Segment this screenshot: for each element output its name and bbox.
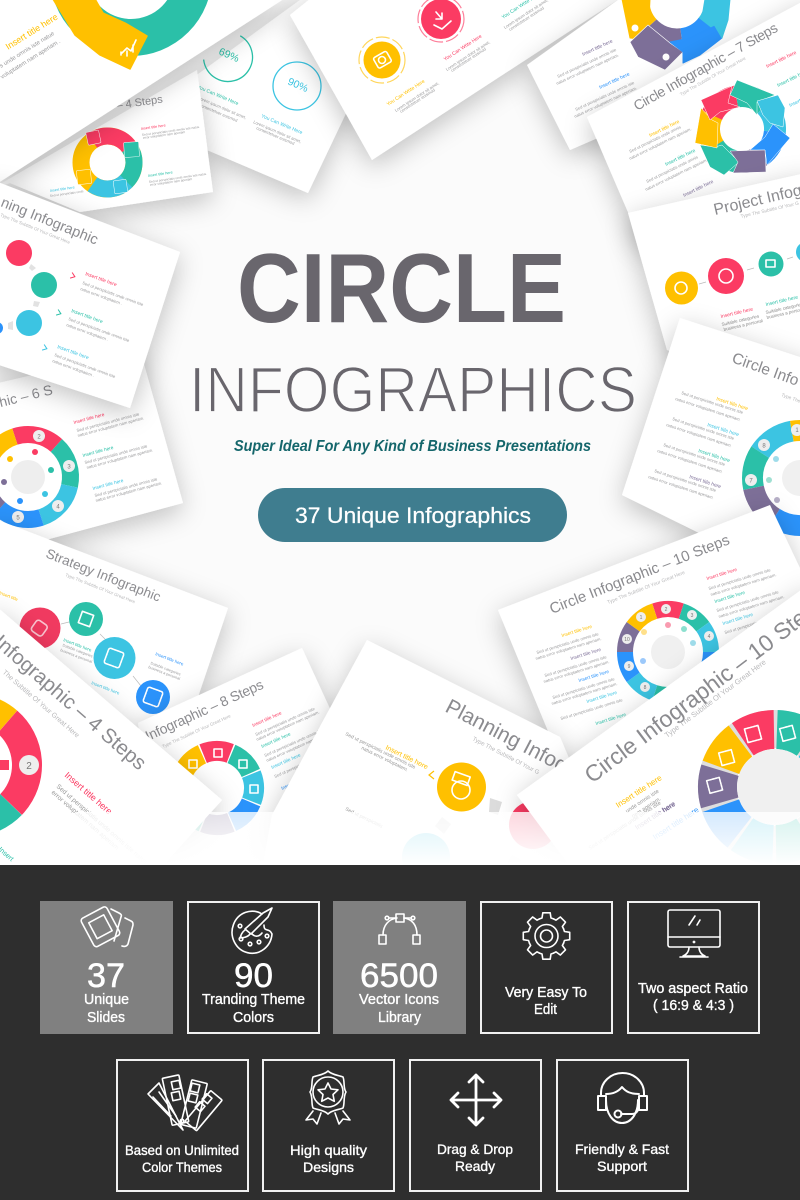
large ten step ring <box>694 706 800 868</box>
slide: circle infographic 10 steps <box>498 505 800 800</box>
slide: circle infographic 6 steps <box>0 350 183 555</box>
ten step captions left: Insert title here <box>570 647 602 662</box>
slide title: Strategy Infographic <box>44 546 163 605</box>
step captions <box>42 271 145 379</box>
captions: natus error voluptatem nam aperiam. <box>555 52 620 86</box>
ten step captions left: Insert title here <box>595 712 627 727</box>
strategy captions: Insert title here <box>91 680 121 696</box>
ten step captions left: Sed ut perspiciatis unde omnis iste <box>536 631 600 655</box>
feature: 6500 vector icons: Vector Icons <box>359 992 439 1008</box>
ten step captions left: Insert title here <box>578 669 610 684</box>
seven step captions: Insert title here <box>765 50 798 70</box>
ten step captions right <box>706 567 785 635</box>
feature: two aspect ratio: Two aspect Ratio <box>638 981 748 997</box>
slide subtitle: Type The Subtitle Of Your Great Here <box>65 572 136 604</box>
eight step captions: Sed ut perspiciatis unde omnis iste <box>672 416 735 441</box>
eight step captions: Insert title here <box>715 396 749 412</box>
step circles <box>402 762 557 881</box>
ten step captions right: Sed ut perspiciatis <box>724 620 758 635</box>
ring fragment <box>53 0 194 69</box>
ten step captions left: Insert title here <box>586 690 618 705</box>
step captions: Insert title here <box>56 344 90 361</box>
slide collage background <box>0 0 800 881</box>
tagline: Super Ideal For Any Kind of Business Presentations <box>234 438 591 455</box>
eight step captions: Insert title here <box>260 731 292 750</box>
feature: 90 theme colors: Colors <box>233 1010 274 1026</box>
heading: CIRCLE: CIRCLE <box>237 233 566 343</box>
step captions: Sed ut perspiciatis unde omnis iste <box>68 316 131 343</box>
90% progress ring: You Can Write Here <box>260 113 303 136</box>
slide subtitle: The Subtitle Of Your Great Here <box>1 669 80 740</box>
feature: unlimited color themes: Color Themes <box>142 1160 222 1175</box>
eight step ring <box>168 739 266 837</box>
four step captions: Insert title here <box>148 171 173 178</box>
slide: circle infographic 8 steps right <box>622 318 800 590</box>
feature: 90 theme colors: Tranding Theme <box>202 992 305 1008</box>
six step ring: 3 <box>67 464 71 470</box>
slide: circle infographic 4 steps <box>0 70 213 212</box>
ten step ring: 4 <box>708 634 711 640</box>
slide subtitle: Type The Subtitle Of Your Great Here <box>663 657 768 740</box>
feature: 37 unique slides: 37 <box>87 957 125 995</box>
slide subtitle: Type The Subtitle Of Your Great Here <box>607 570 686 606</box>
icon: color swatch fan <box>148 1075 222 1131</box>
caption: voluptatem nam aperiam . <box>0 39 62 81</box>
caption: Insert title here <box>4 12 60 52</box>
eight step captions <box>648 390 749 500</box>
90% progress ring <box>253 62 321 146</box>
icon: palette <box>232 908 272 953</box>
six step ring: 2 <box>37 434 41 440</box>
percent caption: consectetuer euismod <box>199 102 239 123</box>
90% progress ring: 90% <box>286 76 310 95</box>
strategy captions: business a personal <box>148 665 181 681</box>
eight step captions: Insert title here <box>697 448 731 464</box>
feature: very easy to edit <box>481 902 612 1033</box>
slide: circle infographic 10 steps large <box>517 580 800 880</box>
captions: Insert title here <box>581 38 614 58</box>
slide: circle infographic 7 steps <box>587 0 800 300</box>
90% progress ring: consectetuer euismod <box>256 125 296 146</box>
feature: high quality designs: High quality <box>290 1142 367 1158</box>
slide title: Planning Infog <box>442 695 571 777</box>
ten step ring: 2 <box>665 607 668 613</box>
six step ring: 5 <box>16 516 20 522</box>
ten step captions left: natus error voluptatem nam aperiam. <box>535 636 602 661</box>
large ten step captions: Insert title here <box>634 801 677 832</box>
large ten step captions: nem aperiam. <box>631 796 663 820</box>
ten step captions right: natus error voluptatem nam aperiam. <box>710 572 777 597</box>
captions: Insert title here <box>598 71 631 91</box>
six step captions: natus error voluptatem nam aperiam. <box>95 480 163 503</box>
step captions: natus error voluptatem . <box>52 358 95 378</box>
caption: error voluptatem nam aperiam <box>50 789 120 852</box>
four step captions: Sed ut perspiciatis unde <box>50 189 84 198</box>
icon: slides <box>80 906 133 948</box>
ten step captions right: Insert title here <box>706 567 738 582</box>
step captions: Insert title here <box>84 271 118 288</box>
ring fragment <box>621 0 733 70</box>
eight step captions: Insert title here <box>706 422 740 438</box>
step captions: Insert title here <box>720 307 754 320</box>
slide title: Circle Infographic – 10 Steps <box>547 532 732 618</box>
ten step captions left <box>535 624 627 727</box>
strategy captions: Suitable categories <box>150 661 181 677</box>
six step captions: Insert title here <box>82 445 114 459</box>
large ten step captions: here <box>661 801 677 815</box>
step captions: natus error voluptatem . <box>80 286 123 306</box>
eight step captions: natus error voluptatem nam aperiam. <box>666 422 733 448</box>
slide subtitle: Type The Subtitle Of Your Great Here <box>161 713 232 749</box>
percent caption: You Can Write Here <box>196 84 239 107</box>
six step captions: Sed ut perspiciatis unde omnis iste <box>84 443 148 465</box>
four step ring <box>0 684 51 846</box>
eight step captions: Sed ut perspiciatis unde omnis iste <box>254 706 316 737</box>
captions: Lorem ipsum dolor sit amet, <box>394 81 440 113</box>
step captions <box>344 731 434 830</box>
feature: 37 unique slides: Slides <box>87 1010 125 1026</box>
strategy captions: Insert title here <box>63 637 93 653</box>
six step ring <box>0 417 88 537</box>
step captions: Sed ut perspiciatis unde omnis iste <box>344 731 416 771</box>
ten step ring: 1 <box>640 615 643 621</box>
ten step captions right: Insert title here <box>722 612 754 627</box>
ten step captions right: natus error voluptatem nam aperiam. <box>718 594 785 619</box>
six step captions: Sed ut perspiciatis unde omnis iste <box>76 411 140 433</box>
large ten step captions <box>588 773 701 852</box>
captions: Sed ut perspiciatis unde omnis iste <box>574 80 636 112</box>
eight step captions: Sed ut perspiciatis unde omnis iste <box>663 442 726 467</box>
slide: circle infographic 8 steps <box>138 648 372 870</box>
feature: friendly support: Friendly & Fast <box>575 1141 669 1157</box>
caption: s unde omnis iste natue <box>0 31 56 70</box>
feature: unlimited color themes: Based on Unlimited <box>125 1143 239 1158</box>
eight step captions: Insert title here <box>280 773 312 792</box>
captions: consectetuer euismod <box>450 46 487 73</box>
eight step captions: Insert title here <box>270 752 302 771</box>
seven step captions: natus error voluptatem nam aperiam. <box>628 126 692 161</box>
features panel <box>0 865 800 1200</box>
captions <box>555 38 638 119</box>
captions: You Can Write Here <box>443 33 483 63</box>
icon: gear <box>523 913 570 959</box>
slide: project infographic <box>628 171 800 400</box>
ten step ring: 3 <box>691 613 694 619</box>
step captions <box>720 295 800 332</box>
ten step ring: 8 <box>644 685 647 691</box>
feature: 6500 vector icons: Library <box>378 1010 422 1026</box>
slide: big yellow and teal ring <box>0 0 290 185</box>
ten step captions left: Sed ut perspiciatis unde omnis iste <box>544 654 608 678</box>
strategy captions: Insert title here <box>155 651 185 667</box>
seven step captions: Sed ut perspiciatis unde omnis <box>645 154 699 184</box>
large ten step captions: Insert title here <box>651 805 701 842</box>
eight step captions: natus error voluptatem nam aperiam. <box>675 396 742 422</box>
four step captions: error voluptatem nam aperiam <box>143 130 186 140</box>
seven step captions: Insert title here <box>648 119 681 139</box>
six step captions: Insert title here <box>92 478 124 492</box>
feature: high quality designs: Designs <box>303 1159 354 1175</box>
feature: friendly support: Support <box>597 1158 647 1174</box>
slide: circle infographic 4 steps large <box>0 601 222 880</box>
captions <box>386 0 549 114</box>
button: 37 unique infographics <box>258 488 567 542</box>
69% progress ring <box>195 24 261 90</box>
percent caption: Lorem ipsum dolor sit amet, <box>198 95 247 120</box>
step circles <box>0 240 57 336</box>
feature: 90 theme colors: 90 <box>234 957 273 995</box>
feature: 6500 vector icons: 6500 <box>360 957 438 995</box>
slide subtitle: Type The Subtitle Of Your Great Here <box>0 212 71 245</box>
slide title: ning Infographic <box>0 195 100 248</box>
captions: natus error voluptatem nam aperiam. <box>573 85 638 119</box>
slide title: Circle Infographic – 7 Steps <box>631 19 780 114</box>
six step captions: natus error voluptatem nam aperiam. <box>86 447 154 470</box>
feature: 6500 vector icons <box>333 901 466 1034</box>
icon: bezier curve <box>379 914 420 944</box>
slide subtitle: Type The Subtitle Of Your G <box>740 201 800 220</box>
six step captions <box>73 411 163 503</box>
ten step captions left: Insert title here <box>561 624 593 639</box>
eight step captions: natus error voluptatem nam aperiam. <box>648 474 715 500</box>
heading: INFOGRAPHICS: INFOGRAPHICS <box>189 353 637 426</box>
four step captions <box>50 124 207 198</box>
feature: high quality designs <box>263 1060 394 1191</box>
icon: monitor <box>668 910 720 957</box>
feature: drag and drop <box>410 1060 541 1191</box>
slide: cropped ring top right <box>527 0 800 150</box>
step captions: business a personal <box>723 318 763 332</box>
slide: strategy infographic <box>0 517 228 780</box>
eight step captions: Sed ut perspiciatis unde omnis iste <box>263 727 325 758</box>
seven step ring <box>695 80 790 176</box>
strategy captions <box>0 590 185 696</box>
seven step captions: Insert title here <box>664 148 697 168</box>
caption: Insert title here <box>63 770 114 817</box>
eight step captions: natus error voluptatem nam aperiam. <box>265 730 330 763</box>
button: 37 unique infographics: 37 Unique Infographics <box>295 503 531 528</box>
slide: planning infographic <box>0 179 180 408</box>
ten step captions right: Sed ut perspiciatis unde omnis iste <box>716 589 780 613</box>
feature: unlimited color themes <box>117 1060 248 1191</box>
feature: friendly support <box>557 1060 688 1191</box>
four step captions: error voluptatem nam aperiam <box>150 177 193 187</box>
yellow camera circle <box>359 37 405 83</box>
caption: Sed ut perspiciatis unde omnis iste natus <box>55 783 149 867</box>
six step ring: 4 <box>56 504 60 510</box>
eight step captions: Insert title here <box>251 710 283 729</box>
feature: two aspect ratio <box>628 902 759 1033</box>
ten step captions left: natus error voluptatem nam aperiam. <box>551 681 618 706</box>
step captions: Suitable categories <box>721 313 760 327</box>
feature: 90 theme colors <box>188 902 319 1033</box>
feature: drag and drop: Ready <box>455 1158 495 1174</box>
eight step ring: 8 <box>762 444 766 450</box>
four step captions: Sed ut perspiciatis unde omnis iste natus <box>142 125 200 137</box>
seven step captions: Sed ut perspiciatis unde omnis <box>628 124 682 154</box>
feature: 37 unique slides <box>40 901 173 1034</box>
percent caption <box>196 84 247 123</box>
eight step ring: 1 <box>795 428 799 434</box>
six step captions: Sed ut perspiciatis unde omnis iste <box>94 476 158 498</box>
step circles <box>665 242 800 304</box>
step captions: Sed ut perspiciatis <box>344 806 384 830</box>
four step ring <box>70 125 145 200</box>
ten step captions left: Sed ut perspiciatis unde omnis iste <box>560 697 624 721</box>
bottom white fade <box>75 812 800 865</box>
step captions: Insert title here <box>765 295 799 308</box>
eight step captions: Sed ut perspiciatis unde omnis iste <box>681 390 744 415</box>
captions: Lorem ipsum dolor sit amet, <box>445 40 491 72</box>
captions: consectetuer euismod <box>399 87 436 114</box>
eight step captions: Insert title here <box>688 474 722 490</box>
strategy captions: Suitable categories <box>62 643 93 659</box>
slide title: – 4 Steps <box>116 94 164 112</box>
eight step captions: Sed ut perspiciatis unde omnis iste <box>273 748 335 779</box>
90% progress ring: Lorem ipsum dolor sit amet, <box>253 119 302 144</box>
seven step captions: Insert title here <box>682 179 715 199</box>
feature: very easy to edit: Very Easy To <box>505 985 587 1001</box>
captions: You Can Write Here <box>386 78 426 108</box>
icon: four way arrows <box>451 1075 501 1125</box>
ten step captions left: Sed ut perspiciatis unde omnis iste <box>552 676 616 700</box>
icon: headset agent <box>598 1073 647 1123</box>
caption <box>0 12 62 81</box>
four step captions: Insert title here <box>50 186 75 193</box>
feature: 37 unique slides: Unique <box>84 992 129 1008</box>
four step ring: 2 <box>26 761 32 772</box>
slide title: Circle Info <box>730 350 800 390</box>
feature: very easy to edit: Edit <box>534 1002 557 1018</box>
four step captions: Sed ut perspiciatis unde omnis iste natus <box>149 172 207 184</box>
ten step captions right: Insert title here <box>714 590 746 605</box>
eight step captions: Sed ut perspiciatis unde omnis iste <box>654 468 717 493</box>
eight step ring: 7 <box>749 478 753 484</box>
large ten step captions: Sed ut perspiciatis unde omnis iste <box>588 800 662 852</box>
six step captions: Insert title here <box>73 412 105 426</box>
six step captions: natus error voluptatem nam aperiam. <box>77 415 145 438</box>
ten step captions left: natus error voluptatem nam aperiam. <box>543 659 610 684</box>
eight step ring <box>734 412 800 544</box>
strategy circles <box>20 602 170 714</box>
ten step ring: 9 <box>628 664 631 670</box>
step captions: Sed ut perspiciatis unde omnis iste <box>54 352 117 379</box>
large ten step captions: Insert title here <box>614 773 664 810</box>
step captions: natus error voluptatem . <box>66 322 109 342</box>
four step captions: Insert title here <box>141 124 166 131</box>
slide: icon circles <box>290 0 625 160</box>
feature: drag and drop: Drag & Drop <box>437 1141 513 1157</box>
step captions: Sed ut perspiciatis unde omnis iste <box>82 280 145 307</box>
slide title: Infographic – 8 Steps <box>143 676 266 744</box>
ten step ring <box>608 592 728 712</box>
eight step captions <box>251 706 335 792</box>
captions: Sed ut perspiciatis unde omnis iste <box>556 47 618 79</box>
step captions: Insert title here <box>384 745 429 771</box>
ten step ring: 10 <box>624 637 630 643</box>
eight step captions: natus error voluptatem nam aperiam. <box>657 448 724 474</box>
large ten step captions: unde omnis iste <box>625 789 660 815</box>
icon: award badge <box>306 1071 350 1124</box>
slide: percent circles <box>190 0 400 193</box>
strategy captions: business a personal <box>60 648 93 664</box>
slide subtitle: Type The Subtitle Of Your Great Here <box>679 55 747 97</box>
step captions: Insert title here <box>70 308 104 325</box>
feature: two aspect ratio: ( 16:9 & 4:3 ) <box>653 998 734 1014</box>
captions: consectetuer euismod <box>508 5 545 32</box>
seven step captions <box>628 50 800 199</box>
ten step captions right: Sed ut perspiciatis unde omnis iste <box>708 567 772 591</box>
slide: planning infographic lower <box>260 640 620 881</box>
slide subtitle: Type The Subtitle Of Your G <box>471 736 540 776</box>
step captions: natus error voluptatem. <box>360 745 409 773</box>
69% progress ring: 69% <box>217 46 241 65</box>
eight step captions: natus error voluptatem nam aperiam. <box>255 709 320 742</box>
caption <box>0 770 149 867</box>
red download circle <box>418 0 464 42</box>
seven step captions: natus error voluptatem nam aperiam. <box>644 157 708 192</box>
